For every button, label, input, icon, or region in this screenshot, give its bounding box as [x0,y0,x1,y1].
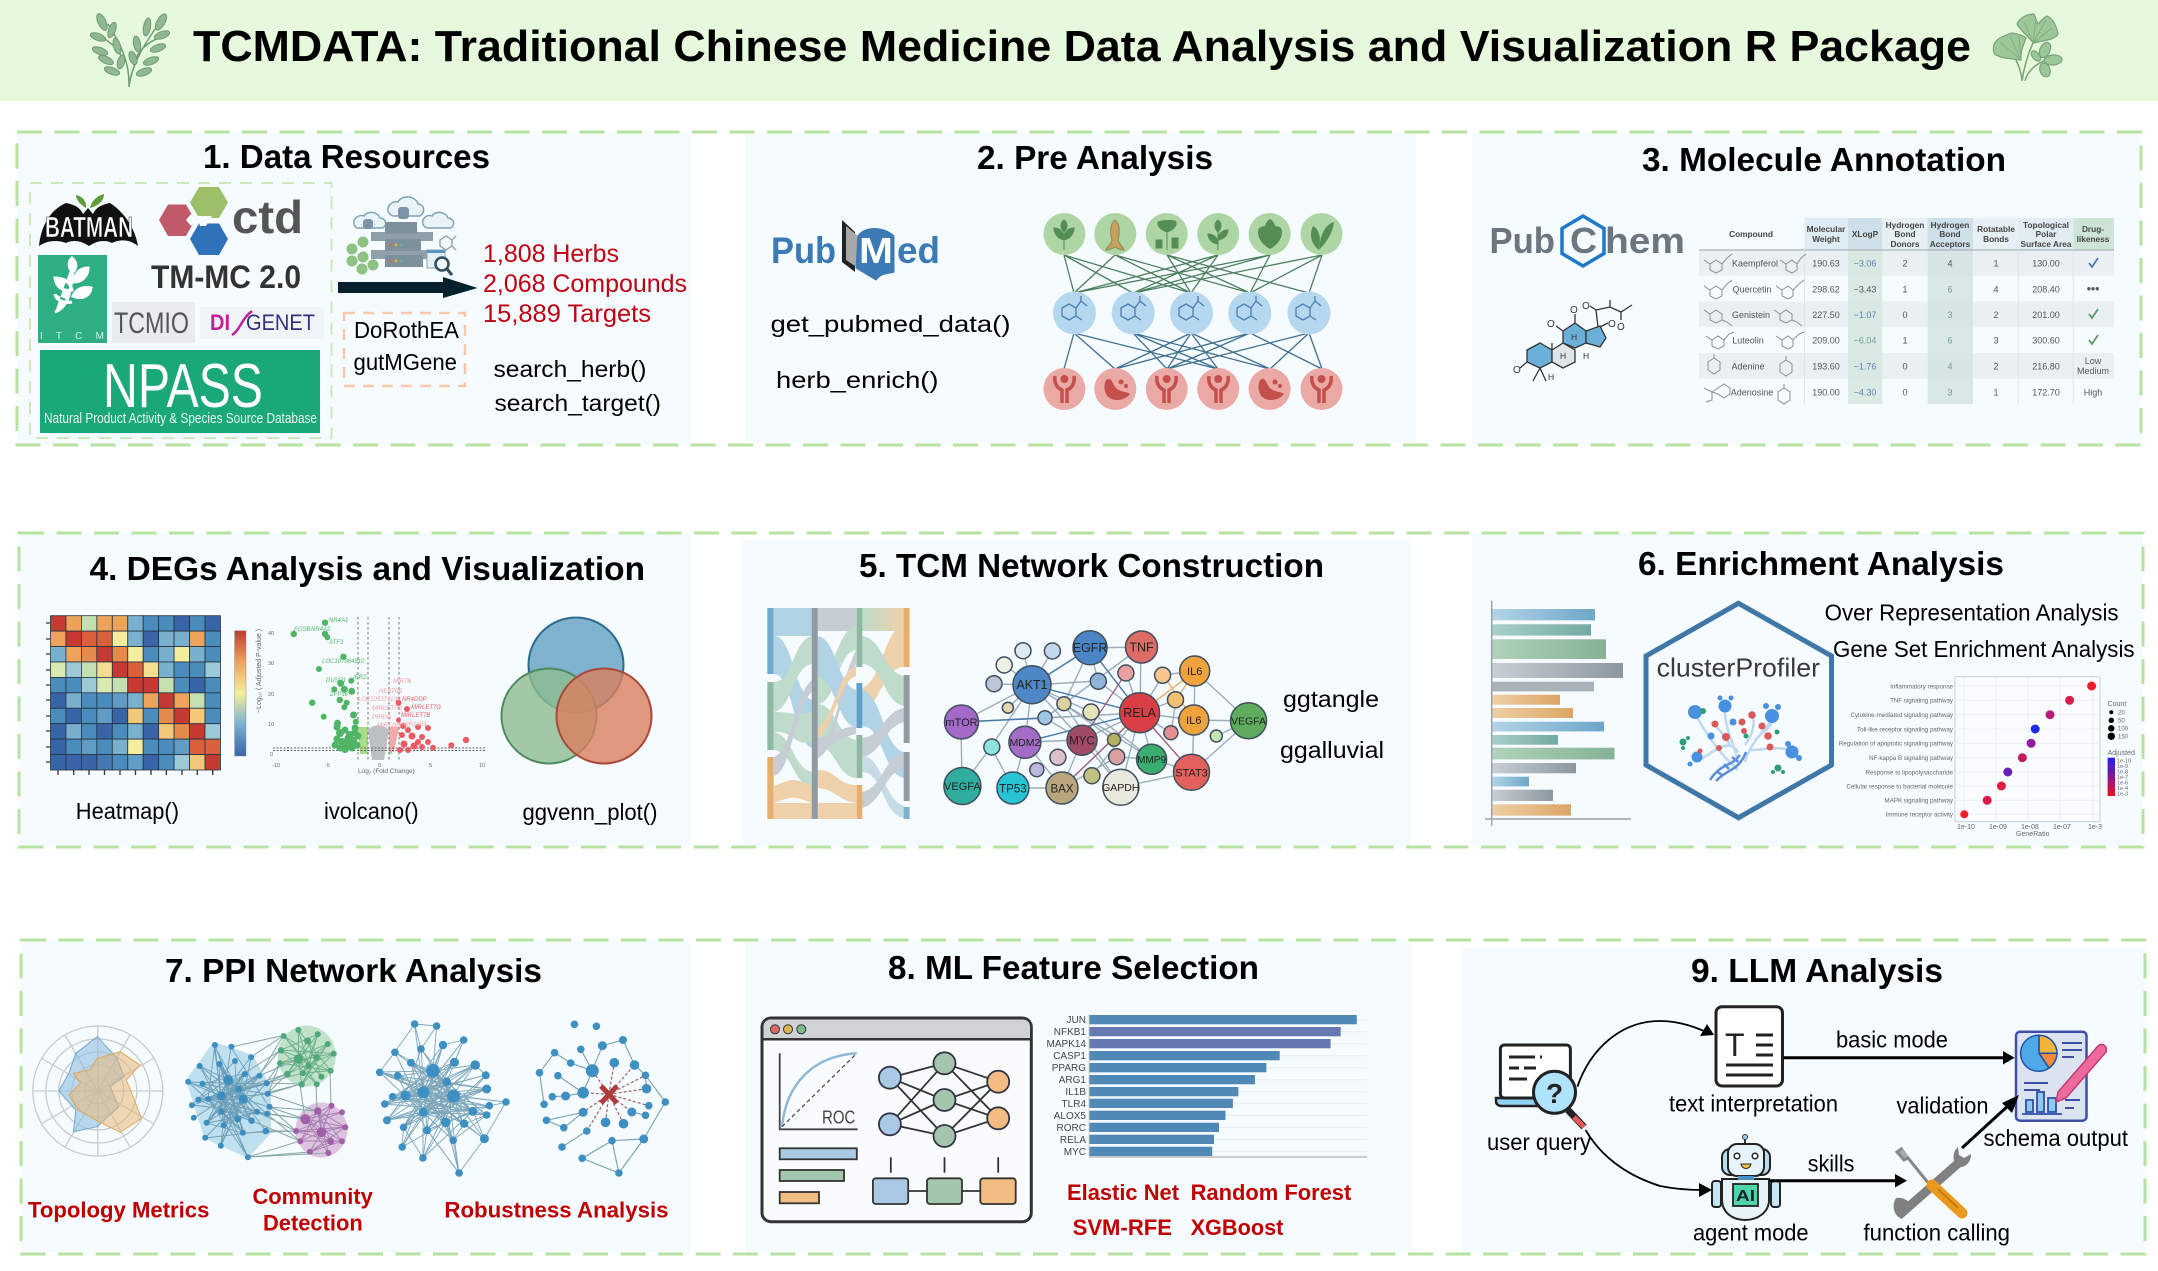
method labels: Random Forest [1191,1180,1352,1205]
pipeline boxes [873,1157,1016,1204]
chart: feature importance: NFKB1 [1054,1027,1086,1038]
analysis labels: Over Representation Analysis [1825,600,2119,626]
chart: volcano plot: MIRLET7G [372,706,402,712]
network: gene interactions: EGFR [1073,641,1107,655]
network: gene interactions: RELA [1123,706,1157,720]
target nodes [1043,368,1342,410]
chart: dot plot: GeneRatio [2016,831,2050,838]
package names: ggalluvial [1280,737,1384,763]
chart: volcano plot [256,617,486,775]
arrow: curve to text interpretation [1577,1021,1714,1087]
chart: volcano plot: LOC107984810 [322,659,365,665]
arrow: validation: validation [1896,1092,1988,1118]
chart: volcano plot: 0 [270,752,273,758]
chart: dot plot: Toll-like receptor signaling pathway [1857,726,1954,734]
table rows: −6.04 [1854,336,1876,346]
header band [0,0,2158,101]
icon: steroid molecule [1513,300,1632,382]
table header: Bonds [1983,234,2009,244]
table rows: Medium [2077,366,2109,376]
function names: search_target() [494,390,661,416]
table rows: 209.00 [1812,336,1840,346]
title: TCMDATA: Traditional Chinese Medicine Data Analysis and Visualization R Package [193,22,1971,71]
chart: dot plot: 1e-9 [2117,764,2128,770]
icon: text document [1716,1007,1782,1086]
table rows: 6 [1947,284,1953,294]
table rows: 130.00 [2032,258,2060,268]
table header: Donors [1890,239,1920,249]
table rows: 3 [1947,310,1953,320]
logo: PubChem: Pub [1490,220,1555,261]
chart: volcano plot: 5 [429,763,432,769]
heading: 2. Pre Analysis [977,139,1213,176]
logo: PubMed: Pub [771,230,836,271]
table rows: 227.50 [1812,310,1840,320]
chart: dot plot: 1e-8 [2117,770,2128,776]
icon: steroid molecule: O [1617,322,1625,333]
label: schema output: schema output [1984,1125,2129,1151]
network: gene interactions: AKT1 [1016,678,1048,692]
chart: feature importance: ARG1 [1059,1075,1086,1086]
color scale [235,631,246,756]
table header: Rotatable [1977,224,2015,234]
compound nodes [1053,292,1330,334]
chart labels: ivolcano() [324,798,419,824]
chart: dot plot: 150 [2118,734,2129,740]
table header: Weight [1812,234,1840,244]
panel: 1 Data Resources [17,132,690,445]
chart: dot plot: 1e-10 [1957,824,1975,831]
logo: BATMAN: BATMAN [45,212,133,244]
chart: dot plot: 100 [2118,726,2129,732]
label: function calling: function calling [1864,1220,2010,1246]
table header: Bond [1894,229,1916,239]
statistics [483,240,687,328]
table rows: −3.06 [1854,258,1876,268]
logo: DisGeNET: GENET [246,310,315,335]
metric labels: Robustness Analysis [444,1197,668,1222]
arrow: skills [1770,1151,1907,1188]
chart: dot plot: 1e-3 [2088,824,2102,831]
icon: steroid molecule: H [1548,372,1554,382]
heading: 8. ML Feature Selection [888,949,1259,986]
panel: 3 Molecule Annotation [1472,132,2141,445]
logo: PubMed: M [859,230,893,271]
panel: 8 ML Feature Selection [745,940,1413,1254]
network: herb-compound-target [1043,213,1342,410]
metric labels: Detection [263,1211,363,1236]
chart: radar [33,1026,163,1156]
chart: dot plot: Response to lipopolysaccharide [1866,770,1954,776]
chart: volcano plot: NR4A2 [311,627,331,633]
chart: volcano plot: MIRLET7B [401,713,430,719]
chart: volcano plot: 0 [378,763,381,769]
table rows: 190.00 [1812,388,1840,398]
icon: steroid molecule: H [1583,351,1589,361]
label: agent mode: agent mode [1693,1220,1809,1246]
table rows: 0 [1902,362,1908,372]
logo: ITCM: I T C M [40,331,104,342]
chart: feature importance: RELA [1060,1135,1086,1146]
label: user query: user query [1487,1129,1591,1155]
table rows: 300.60 [2032,336,2060,346]
database logo group [30,183,332,438]
chart: volcano plot: MIRLET7G [411,705,441,711]
chart: volcano plot: MIR1283 [402,722,427,728]
chart: feature importance: PPARG [1052,1063,1086,1074]
heading: 5. TCM Network Construction [859,547,1324,584]
logo: TCMIO: TCMIO [114,307,189,340]
table rows: Low [2085,356,2102,366]
table header: Drug- [2082,224,2104,234]
table rows [1704,254,2109,404]
chart: volcano plot: -5 [325,763,330,769]
chart: volcano plot: Log₂ (Fold Change) [358,768,415,775]
analysis labels [1825,600,2135,662]
logo: PubMed [771,220,940,280]
chart: volcano plot: LOC105371230 [358,697,401,703]
panel: 9 LLM Analysis [1462,948,2145,1254]
icon: steroid molecule: O [1547,319,1555,330]
chart: dot plot: Adjusted [2108,750,2135,757]
table rows: 3 [1993,336,1999,346]
network: communities [185,1026,348,1160]
logo: TCMIO [112,302,195,343]
heading: 1. Data Resources [203,138,490,175]
logo: ctd: ctd [232,191,303,243]
table rows: Adenine [1731,362,1765,372]
table rows: 4 [1947,258,1953,268]
chart labels: Heatmap() [76,798,179,824]
icon: steroid molecule: H [1571,332,1577,342]
chart: dot plot: 1e-09 [1989,824,2007,831]
network: gene interactions: STAT3 [1175,768,1208,780]
table rows: 201.00 [2032,310,2060,320]
chart: volcano plot: MIR1283 [377,723,402,729]
chart: volcano plot: DUSP1 [326,678,346,684]
chart labels: ggvenn_plot() [522,799,658,825]
chart: feature importance: TLR4 [1062,1099,1086,1110]
network: gene interactions [944,631,1266,805]
network: gene interactions: IL6 [1186,715,1201,727]
chart: dot plot: 1e-7 [2117,775,2128,781]
table: compounds [1699,218,2114,404]
chart: dot plot: Cellular response to bacterial molecule [1846,784,1954,790]
chart: volcano plot: 30 [268,661,274,667]
icon: steroid molecule: O [1608,319,1616,330]
chart: volcano plot: PRRX1 [372,715,392,721]
table rows: 2 [1993,310,1999,320]
chart: volcano plot: 20 [268,692,274,698]
table rows: −1.07 [1854,310,1876,320]
chart: dot plot: 1e-10 [2117,758,2131,764]
network: gene interactions: TNF [1129,640,1154,654]
chart: feature importance: ALOX5 [1054,1111,1086,1122]
icon: steroid molecule: O [1570,305,1578,316]
herb nodes [1043,213,1342,255]
table rows: −4.30 [1854,388,1876,398]
table rows: Luteolin [1732,336,1764,346]
logo: PubMed: ed [897,230,940,271]
network: gene interactions: IL6 [1187,666,1202,678]
chart: volcano plot: 10 [479,763,485,769]
table header: Hydrogen [1931,220,1969,230]
panel: 5 TCM Network Construction [742,540,1411,847]
chart: volcano plot: 10 [268,722,274,728]
panel: 2 Pre Analysis [745,132,1416,443]
chart: feature importance: CASP1 [1053,1051,1086,1062]
icon: AI robot [1712,1134,1780,1220]
icon: steroid molecule: O [1582,301,1590,312]
function names: herb_enrich() [776,367,938,393]
arrow: basic mode [1783,1026,2015,1064]
table header: Compound [1729,229,1773,239]
table rows: 172.70 [2032,388,2060,398]
package names [1280,686,1384,763]
table rows: 208.40 [2032,284,2060,294]
chart: dot plot: MAPK signaling pathway [1885,798,1954,804]
metric labels: Community [252,1184,374,1209]
network: gene interactions: VEGFA [944,781,981,793]
panel: 4 DEGs Analysis and Visualization [19,533,690,847]
table header: Topological [2023,220,2069,230]
icon: ginkgo leaves [1993,14,2062,81]
heading: 3. Molecule Annotation [1642,141,2006,178]
chart: dot plot: 50 [2118,718,2125,724]
table rows: 6 [1947,336,1953,346]
chart labels [76,798,658,825]
package names: ggtangle [1283,686,1379,712]
chart: volcano plot: HEATR9 [379,689,403,695]
table header [1729,220,2110,249]
arrow: curve to agent mode [1586,1130,1712,1197]
heading: 9. LLM Analysis [1691,952,1943,989]
table rows: 1 [1993,258,1999,268]
method labels: XGBoost [1191,1215,1284,1240]
chart: feature importance: MAPK14 [1047,1039,1086,1050]
table rows: 4 [1947,362,1953,372]
network: gene interactions: BAX [1050,784,1074,796]
table rows: 2 [1993,362,1999,372]
chart: volcano plot: ZFP36 [329,692,349,698]
illustration: model window [762,1018,1031,1222]
table rows: −1.76 [1854,362,1876,372]
arrow: basic mode: basic mode [1836,1026,1948,1052]
chart: feature importance [1047,1014,1367,1158]
icon: gene tree [1680,696,1802,781]
chart: volcano plot: −Log₁₀ ( Adjusted P-value ) [256,629,263,713]
network: robustness with removed node [536,1021,669,1177]
table header: Bond [1939,229,1961,239]
arrow: skills: skills [1808,1151,1854,1177]
extra databases box [344,313,465,386]
logo: PubChem [1490,216,1685,266]
logo: NPASS [40,350,320,433]
table rows: −3.43 [1854,284,1876,294]
icon: wrench and screwdriver [1894,1147,1971,1219]
table rows: 4 [1993,284,1999,294]
analysis labels: Gene Set Enrichment Analysis [1833,636,2135,662]
neural network [879,1052,1009,1147]
logo: ctd [159,187,303,255]
table header: likeness [2077,234,2110,244]
network: gene interactions: mTOR [945,717,978,729]
logo: NPASS: Natural Product Activity & Species Source Database [44,410,317,427]
table rows: 1 [1993,388,1999,398]
chart: volcano plot: -10 [272,763,280,769]
heading: 4. DEGs Analysis and Visualization [90,550,645,587]
method labels: SVM-RFE [1073,1215,1172,1240]
network: gene interactions: MMP9 [1137,755,1166,766]
heading: 7. PPI Network Analysis [165,952,542,989]
table header: Molecular [1807,224,1846,234]
logo: PubChem: hem [1605,220,1685,261]
statistics: 1,808 Herbs [483,240,619,268]
icon: steroid molecule: H [1560,351,1566,361]
function names [770,311,1010,393]
statistics: 15,889 Targets [483,300,651,328]
chart: feature importance: MYC [1064,1147,1086,1158]
chart: dot plot: 1e-3 [2117,792,2128,798]
chart: dot plot: 1e-07 [2053,824,2071,831]
logo: NPASS: NPASS [103,352,263,421]
chart: volcano plot: MIR7B [393,679,411,685]
chart: dot plot: NF-kappa B signaling pathway [1869,755,1954,762]
icon: steroid molecule: O [1513,365,1521,376]
chart: enrichment bars [1485,601,1631,826]
table rows: 190.63 [1812,258,1840,268]
function names: get_pubmed_data() [770,311,1010,337]
function names [494,356,661,416]
chart: feature importance: JUN [1067,1015,1086,1026]
chart: volcano plot: IER2 [353,675,367,681]
table rows: ••• [2087,282,2099,296]
icon: cloud servers [346,197,456,275]
table header: Acceptors [1930,239,1971,249]
table rows: 0 [1902,310,1908,320]
network: dense PPI [376,1020,510,1177]
icon: text document: T [1725,1027,1745,1063]
table header: XLogP [1852,229,1879,239]
network: gene interactions: TP53 [999,784,1027,796]
table rows: Genistein [1732,310,1770,320]
function names: search_herb() [494,356,646,382]
chart: volcano plot: FOSB [294,627,310,633]
network: gene interactions: MYC [1069,736,1095,748]
table rows: 3 [1947,388,1953,398]
chart: dot plot: TNF signaling pathway [1890,698,1954,704]
logo: ITCM [38,255,107,343]
chart: dot plot: Immune receptor activity [1886,812,1954,818]
chart: dot plot: Regulation of apoptotic signaling pathway [1839,740,1954,748]
chart: volcano plot: ATF3 [328,640,344,646]
chart: dot plot: Inflammatory response [1890,684,1954,690]
table header: Surface Area [2021,239,2072,249]
metric labels [28,1184,668,1236]
chart: dot plot: 1e-08 [2021,824,2039,831]
network: gene interactions: MDM2 [1009,737,1041,749]
table header: Hydrogen [1886,220,1924,230]
icon: schema report [2016,1032,2106,1121]
chart: dot plot: 20 [2118,710,2125,716]
icon: user query: ? [1546,1078,1563,1109]
extra databases box: DoRothEA [354,317,460,343]
heading: 6. Enrichment Analysis [1638,545,2004,582]
table rows: Adenosine [1731,388,1773,398]
panel: 6 Enrichment Analysis [1472,533,2143,847]
table rows: 298.62 [1812,284,1840,294]
arrow: to statistics [338,277,478,298]
logo: clusterProfiler hexagon: clusterProfiler [1657,653,1820,683]
method labels: Elastic Net [1067,1180,1180,1205]
icon: AI robot: AI [1736,1188,1755,1205]
chart: dot plot: Count [2108,701,2126,708]
icon: herb sprig [89,12,171,87]
network: gene interactions: GAPDH [1102,782,1139,794]
chart: volcano plot: NR4A1 [329,618,348,624]
chart: feature importance: IL1B [1065,1087,1086,1098]
method labels [1067,1180,1352,1240]
table rows: 1 [1902,336,1908,346]
table header: Polar [2036,229,2057,239]
chart: venn diagram [502,618,652,764]
legend bars [780,1148,857,1203]
logo: TM-MC 2.0: TM-MC 2.0 [151,259,301,295]
chart: alluvial [767,608,910,819]
label: text interpretation: text interpretation [1669,1091,1838,1117]
extra databases box: gutMGene [354,349,457,375]
logo: DisGeNET: DI [210,310,230,335]
icon: user query [1496,1045,1584,1127]
table rows: Quercetin [1732,284,1772,294]
metric labels: Topology Metrics [28,1197,209,1222]
arrow: validation [1896,1092,2019,1148]
table rows: Kaempferol [1732,258,1778,268]
logo: DisGeNET [200,307,324,339]
chart: heatmap [46,616,220,775]
chart: dot plot: 1e-4 [2117,786,2128,792]
chart: dot plot [1839,677,2135,838]
table rows: 1 [1902,284,1908,294]
table rows: 0 [1902,388,1908,398]
chart: dot plot: 1e-6 [2117,780,2128,786]
logo: clusterProfiler hexagon [1646,603,1832,818]
table rows: 2 [1902,258,1908,268]
network: gene interactions: VEGFA [1231,716,1266,728]
logo: PubChem: C [1570,220,1597,261]
table rows: 216.80 [2032,362,2060,372]
table rows: High [2084,388,2102,398]
statistics: 2,068 Compounds [483,270,687,298]
panel: 7 PPI Network Analysis [21,940,690,1254]
chart: feature importance: RORC [1057,1123,1086,1134]
table rows: 193.60 [1812,362,1840,372]
chart: dot plot: Cytokine-mediated signaling pathway [1850,712,1954,719]
ROC chart [780,1053,858,1129]
chart: volcano plot: NR4DDP [402,697,427,703]
chart: volcano plot: 40 [268,631,274,637]
ROC chart: ROC [822,1107,855,1127]
logo: BATMAN [39,194,138,246]
